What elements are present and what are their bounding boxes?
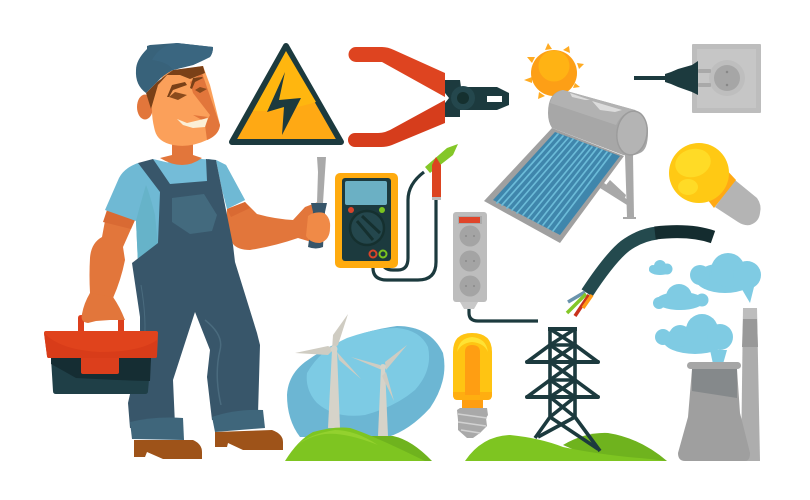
green probe xyxy=(425,144,458,173)
icon: stripped electric cable xyxy=(567,232,713,316)
screwdriver xyxy=(308,157,327,248)
icon: pliers xyxy=(348,47,509,147)
icon: green hills under pylon xyxy=(465,433,667,461)
collector panel xyxy=(484,128,624,243)
icon: multimeter xyxy=(335,144,458,280)
stand xyxy=(600,155,636,219)
shirt xyxy=(105,158,245,264)
icon: sun xyxy=(524,43,584,99)
icon: high voltage warning triangle xyxy=(232,46,341,142)
turbine 1 xyxy=(295,314,361,428)
face xyxy=(150,66,220,146)
face shadow xyxy=(190,73,220,140)
ear xyxy=(137,94,153,120)
back hill xyxy=(370,436,432,461)
nose xyxy=(193,115,208,120)
blue sky blob xyxy=(287,326,444,437)
storage tank xyxy=(548,90,648,156)
icon: light bulb xyxy=(669,143,761,225)
icon: electricity pylon xyxy=(527,329,600,451)
hand on toolbox handle xyxy=(82,293,125,323)
overalls and trousers xyxy=(128,159,260,428)
right boot xyxy=(215,430,283,450)
icon: smoke clouds xyxy=(649,253,761,364)
icon: wind turbines on hill xyxy=(285,314,444,461)
toolbox xyxy=(44,315,158,394)
hair xyxy=(146,66,205,109)
cap xyxy=(136,43,213,93)
right arm xyxy=(226,202,318,250)
icon: incandescent lamp xyxy=(453,333,492,438)
red probe xyxy=(432,157,441,197)
icon: chimney xyxy=(741,308,760,461)
left arm xyxy=(82,210,135,318)
icon: solar water heater xyxy=(484,90,650,243)
turbine 2 xyxy=(351,345,407,436)
meter cables xyxy=(373,172,436,280)
eyebrows and eyes xyxy=(167,77,207,100)
neck xyxy=(160,143,202,165)
figure: electrician with toolbox xyxy=(44,43,330,459)
left boot xyxy=(134,440,202,459)
icon: power strip xyxy=(453,212,538,321)
fingers xyxy=(306,212,330,243)
icon: cooling tower xyxy=(678,362,750,461)
icon: wall socket with plug xyxy=(634,44,761,113)
front hill xyxy=(285,428,425,461)
trouser cuffs xyxy=(130,418,184,440)
smile xyxy=(177,118,208,128)
